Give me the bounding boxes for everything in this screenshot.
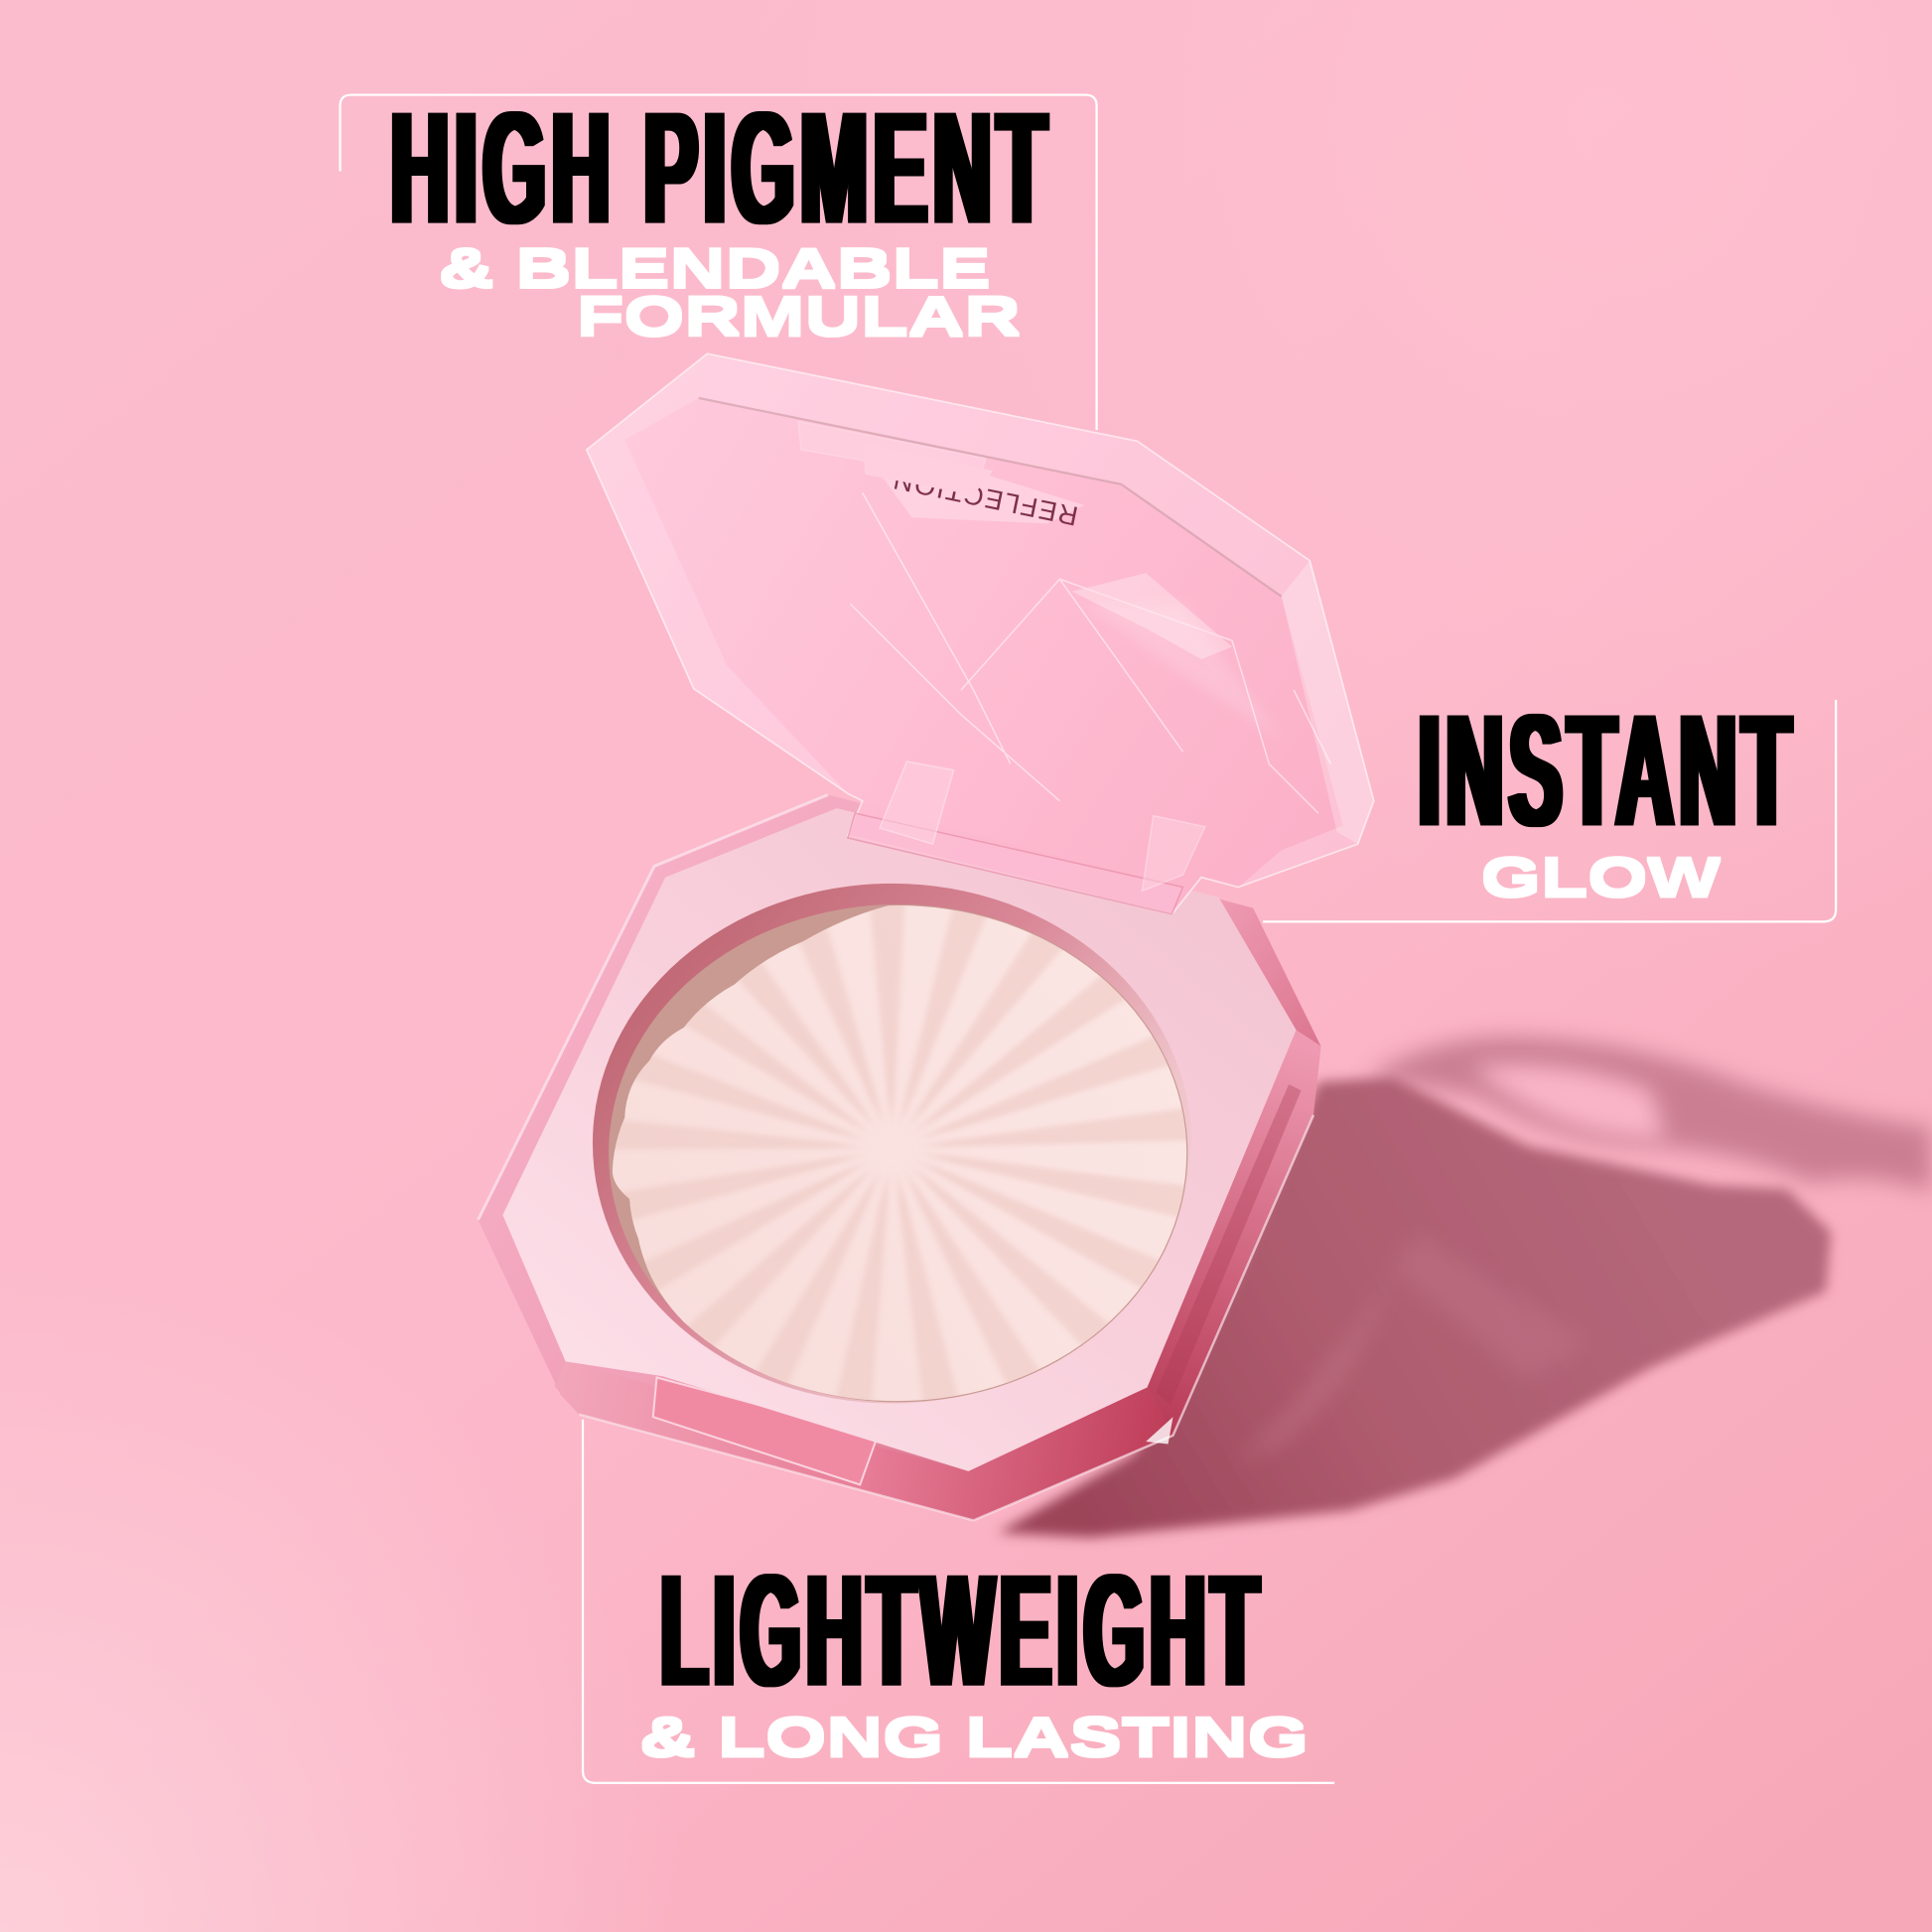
powder with sunburst embossing bbox=[612, 905, 1187, 1402]
lid edge outline bbox=[587, 353, 1374, 914]
subheading: glow: GLOW bbox=[1481, 847, 1721, 907]
lid body bbox=[587, 353, 1374, 914]
metallic plate bbox=[502, 808, 1297, 1471]
right rim dark band bbox=[1156, 1084, 1302, 1405]
callout frame: high pigment bbox=[341, 95, 1097, 430]
heading: high pigment: HIGH PIGMENT bbox=[390, 79, 1052, 258]
lid bright facet bbox=[1072, 573, 1232, 659]
callout frame: instant glow bbox=[1263, 700, 1836, 921]
left transparent rim highlight bbox=[479, 794, 828, 1220]
glare lines on rim bbox=[579, 1115, 1313, 1520]
lid outer bevel bbox=[587, 353, 1374, 888]
subheading: formular: FORMULAR bbox=[577, 287, 1021, 347]
subheading: blendable: & BLENDABLE bbox=[439, 238, 991, 299]
infographic canvas: LIGHTWEIGHT bbox=[660, 1542, 1264, 1721]
right hinge tab bbox=[1142, 816, 1205, 891]
sunburst grooves bbox=[616, 905, 1185, 1400]
lid logo reflection bbox=[863, 450, 1084, 523]
lid brand text seen through: REFLECTION bbox=[890, 464, 1080, 532]
callout frame: lightweight bbox=[583, 1420, 1334, 1783]
left hinge tab bbox=[880, 761, 954, 844]
powder centre glow bbox=[863, 1125, 919, 1175]
cast shadow of compact and leaves bbox=[998, 1036, 1932, 1538]
highlighter compact bbox=[479, 794, 1320, 1520]
lid right bevel shine bbox=[1282, 561, 1374, 844]
lid lower strip over plate bbox=[848, 813, 1182, 914]
pan well bbox=[609, 904, 1187, 1402]
subheading: long lasting: & LONG LASTING bbox=[639, 1708, 1309, 1768]
right rim bbox=[1147, 1031, 1320, 1436]
recessed pan ring bbox=[593, 884, 1191, 1404]
compact base: case edge bbox=[479, 794, 1320, 1520]
transparent open lid bbox=[587, 353, 1374, 914]
lid clasp bbox=[798, 421, 986, 481]
lid clasp tab bbox=[863, 444, 993, 495]
bottom rim bbox=[554, 1361, 1173, 1520]
lid inner seam bbox=[699, 398, 1282, 597]
latch bbox=[653, 1378, 878, 1484]
lid facets bbox=[850, 492, 1330, 813]
